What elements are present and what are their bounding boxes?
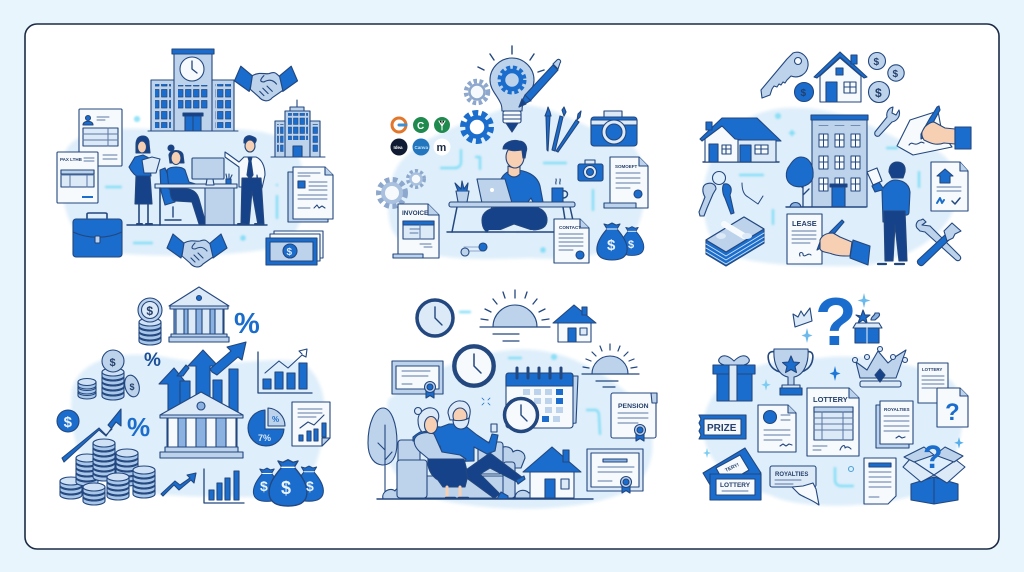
document: contract	[554, 219, 589, 263]
document: report chart	[292, 402, 330, 446]
document: certificate bottom	[587, 449, 643, 493]
icon: central bank	[160, 392, 243, 458]
platform logos: Idea	[394, 145, 403, 150]
icon: house with chimney	[814, 52, 867, 102]
icon: money bags: $	[607, 237, 616, 254]
chart: line and bars	[258, 349, 312, 393]
icon: top coin stack	[138, 298, 162, 345]
icon: mystery box	[903, 439, 965, 504]
icon: tree and shrubs	[368, 408, 532, 499]
icon: money bags: $	[628, 239, 634, 251]
document: plain sheet	[864, 458, 896, 504]
icon: money bags: $	[306, 478, 314, 494]
icon: gift box	[713, 356, 755, 401]
icon: large camera	[591, 111, 637, 146]
figure: standing woman	[129, 136, 160, 224]
icon: trophy	[768, 349, 813, 395]
icon: small camera	[578, 160, 603, 181]
icon: percent large: %	[234, 308, 260, 340]
panel: employment	[57, 49, 333, 267]
figure: seated woman	[160, 145, 206, 224]
icon: house bottom	[523, 447, 581, 498]
document: pension	[611, 393, 657, 441]
icon: wrench	[875, 107, 900, 136]
background blob	[388, 105, 646, 259]
document: main lottery sheet	[807, 388, 859, 456]
background blob	[703, 108, 957, 266]
platform logos	[390, 117, 450, 156]
document: invoice	[393, 204, 439, 258]
figure: landlord holding note	[867, 162, 910, 264]
card: royalties with hand	[770, 466, 819, 505]
arrow: small rising	[161, 473, 196, 496]
figure: freelancer at desk	[447, 140, 575, 233]
icon: dollar coins: $	[800, 88, 806, 99]
man torso and arm	[413, 424, 498, 462]
icon: paint brushes	[545, 107, 581, 152]
document: main lottery sheet: LOTTERY	[813, 395, 848, 404]
icon: light bulb with gear	[478, 46, 544, 132]
connector glows	[106, 117, 277, 243]
icon: money bags	[253, 460, 323, 506]
icon: sofa	[397, 440, 515, 498]
icon: handshake bottom	[167, 234, 227, 267]
connector glows	[460, 312, 600, 434]
background blob	[62, 129, 305, 256]
icon: handshake top	[234, 66, 298, 101]
icon: house top	[553, 305, 596, 342]
icon: clock middle	[452, 344, 496, 388]
icon: large key	[761, 52, 808, 98]
glowing corner	[835, 466, 854, 486]
icon: top coin stack: $	[146, 304, 153, 318]
icon: dollar coins: $	[875, 86, 882, 100]
document: form	[79, 109, 122, 166]
icon: banknotes: $	[286, 247, 292, 258]
document: certificate left	[392, 361, 443, 398]
document: royalties stack: ROYALTIES	[884, 407, 910, 412]
icon: tools	[916, 219, 961, 266]
document: agreement	[604, 157, 648, 208]
icon: coin stacks upper left: $	[130, 382, 135, 392]
gears	[379, 81, 491, 206]
platform logos: C	[417, 121, 424, 132]
tickets: lottery: TERY!	[724, 462, 741, 474]
icon: big question mark: ?	[815, 284, 857, 360]
icon: percent small: %	[144, 350, 161, 371]
icon: small crown	[793, 308, 812, 327]
woman	[414, 433, 466, 465]
panel: rental income	[699, 52, 971, 266]
chart: rising bars and arrows	[159, 342, 246, 413]
document: pay stub	[57, 152, 98, 203]
icon: money bags	[597, 223, 644, 260]
icon: pen	[519, 59, 561, 107]
icon: apartment building	[811, 115, 868, 207]
figure: standing man	[225, 136, 265, 225]
sparkles	[703, 293, 964, 458]
card: royalties with hand: ROYALTIES	[775, 472, 808, 478]
document: contract: CONTACT	[559, 225, 581, 230]
hand signing paper	[897, 106, 971, 155]
document: lottery small: LOTTERY	[922, 367, 942, 372]
document: lease: LEASE	[792, 219, 817, 228]
desk and monitor	[155, 158, 237, 225]
document: lease	[787, 214, 822, 264]
chart: pie	[248, 408, 285, 446]
icon: cash stack	[706, 217, 764, 266]
tickets: lottery: LOTTERY	[720, 482, 751, 489]
icon: coin stacks upper left: $	[110, 357, 116, 369]
panel: freelance	[379, 46, 648, 263]
icon: opening star box	[853, 310, 882, 343]
icon: dollar coins: $	[874, 57, 880, 68]
icon: dollar coin	[57, 410, 79, 432]
icon: top bank	[169, 287, 229, 342]
icon: money bags: $	[281, 478, 291, 498]
panel: investments	[57, 287, 330, 506]
icon: link toggle	[461, 243, 487, 256]
document: pension: PENSION	[618, 403, 649, 410]
icon: clock on calendar	[504, 398, 538, 432]
background blob	[385, 349, 652, 509]
document: house deed	[931, 162, 968, 211]
background blob	[71, 355, 325, 497]
document: signed contract	[288, 167, 333, 222]
icon: sunrise right	[582, 344, 639, 387]
document: question sheet	[937, 388, 968, 427]
platform logos: Canva	[414, 145, 429, 150]
man legs	[466, 453, 523, 498]
document: agreement: SOMOEFT	[615, 164, 638, 169]
platform logos: m	[436, 142, 446, 154]
icon: mystery box: ?	[923, 439, 943, 475]
background blob	[703, 357, 963, 506]
icon: calendar	[506, 368, 578, 428]
icon: left house	[700, 118, 781, 162]
connector glows	[441, 150, 593, 252]
ground line	[377, 498, 593, 500]
floor line	[127, 224, 267, 226]
document: royalties stack	[876, 401, 913, 448]
chart: pie: 7%	[258, 433, 271, 443]
icon: dollar coins: $	[892, 69, 898, 80]
panel: lottery and royalties	[699, 284, 968, 506]
icon: tree	[786, 157, 866, 207]
icon: dollar coin: $	[64, 414, 73, 431]
icon: large crown	[852, 346, 908, 387]
icon: main office building	[148, 49, 238, 131]
ticket: prize: PRIZE	[707, 423, 737, 434]
icon: money bags: $	[260, 478, 268, 494]
icon: percent middle: %	[127, 412, 150, 442]
icon: dollar coins	[794, 52, 904, 102]
hand writing lease	[817, 220, 870, 265]
tickets: lottery	[703, 448, 761, 500]
document: lottery small	[918, 363, 948, 403]
document: question sheet: ?	[945, 399, 960, 426]
icon: clock top	[417, 300, 453, 336]
icon: coin stacks upper left	[78, 350, 142, 400]
figure: older couple	[413, 401, 525, 499]
document: pay stub: PAX LTHB	[60, 157, 83, 162]
icon: coin stacks bottom	[60, 439, 155, 505]
icon: briefcase	[73, 213, 122, 257]
panel: retirement	[368, 290, 657, 509]
chart: pie: %	[272, 415, 279, 424]
arrow: rising line	[62, 409, 121, 462]
chart: bar chart bottom	[204, 469, 244, 503]
connector glows	[740, 114, 919, 224]
icon: keys	[699, 172, 734, 216]
document: invoice: INVOICE	[402, 210, 429, 217]
icon: sunrise top	[480, 290, 550, 341]
icon: small tower	[271, 100, 325, 157]
ticket: prize	[699, 415, 746, 439]
icon: banknotes	[266, 231, 323, 265]
document: globe sheet	[758, 405, 796, 452]
